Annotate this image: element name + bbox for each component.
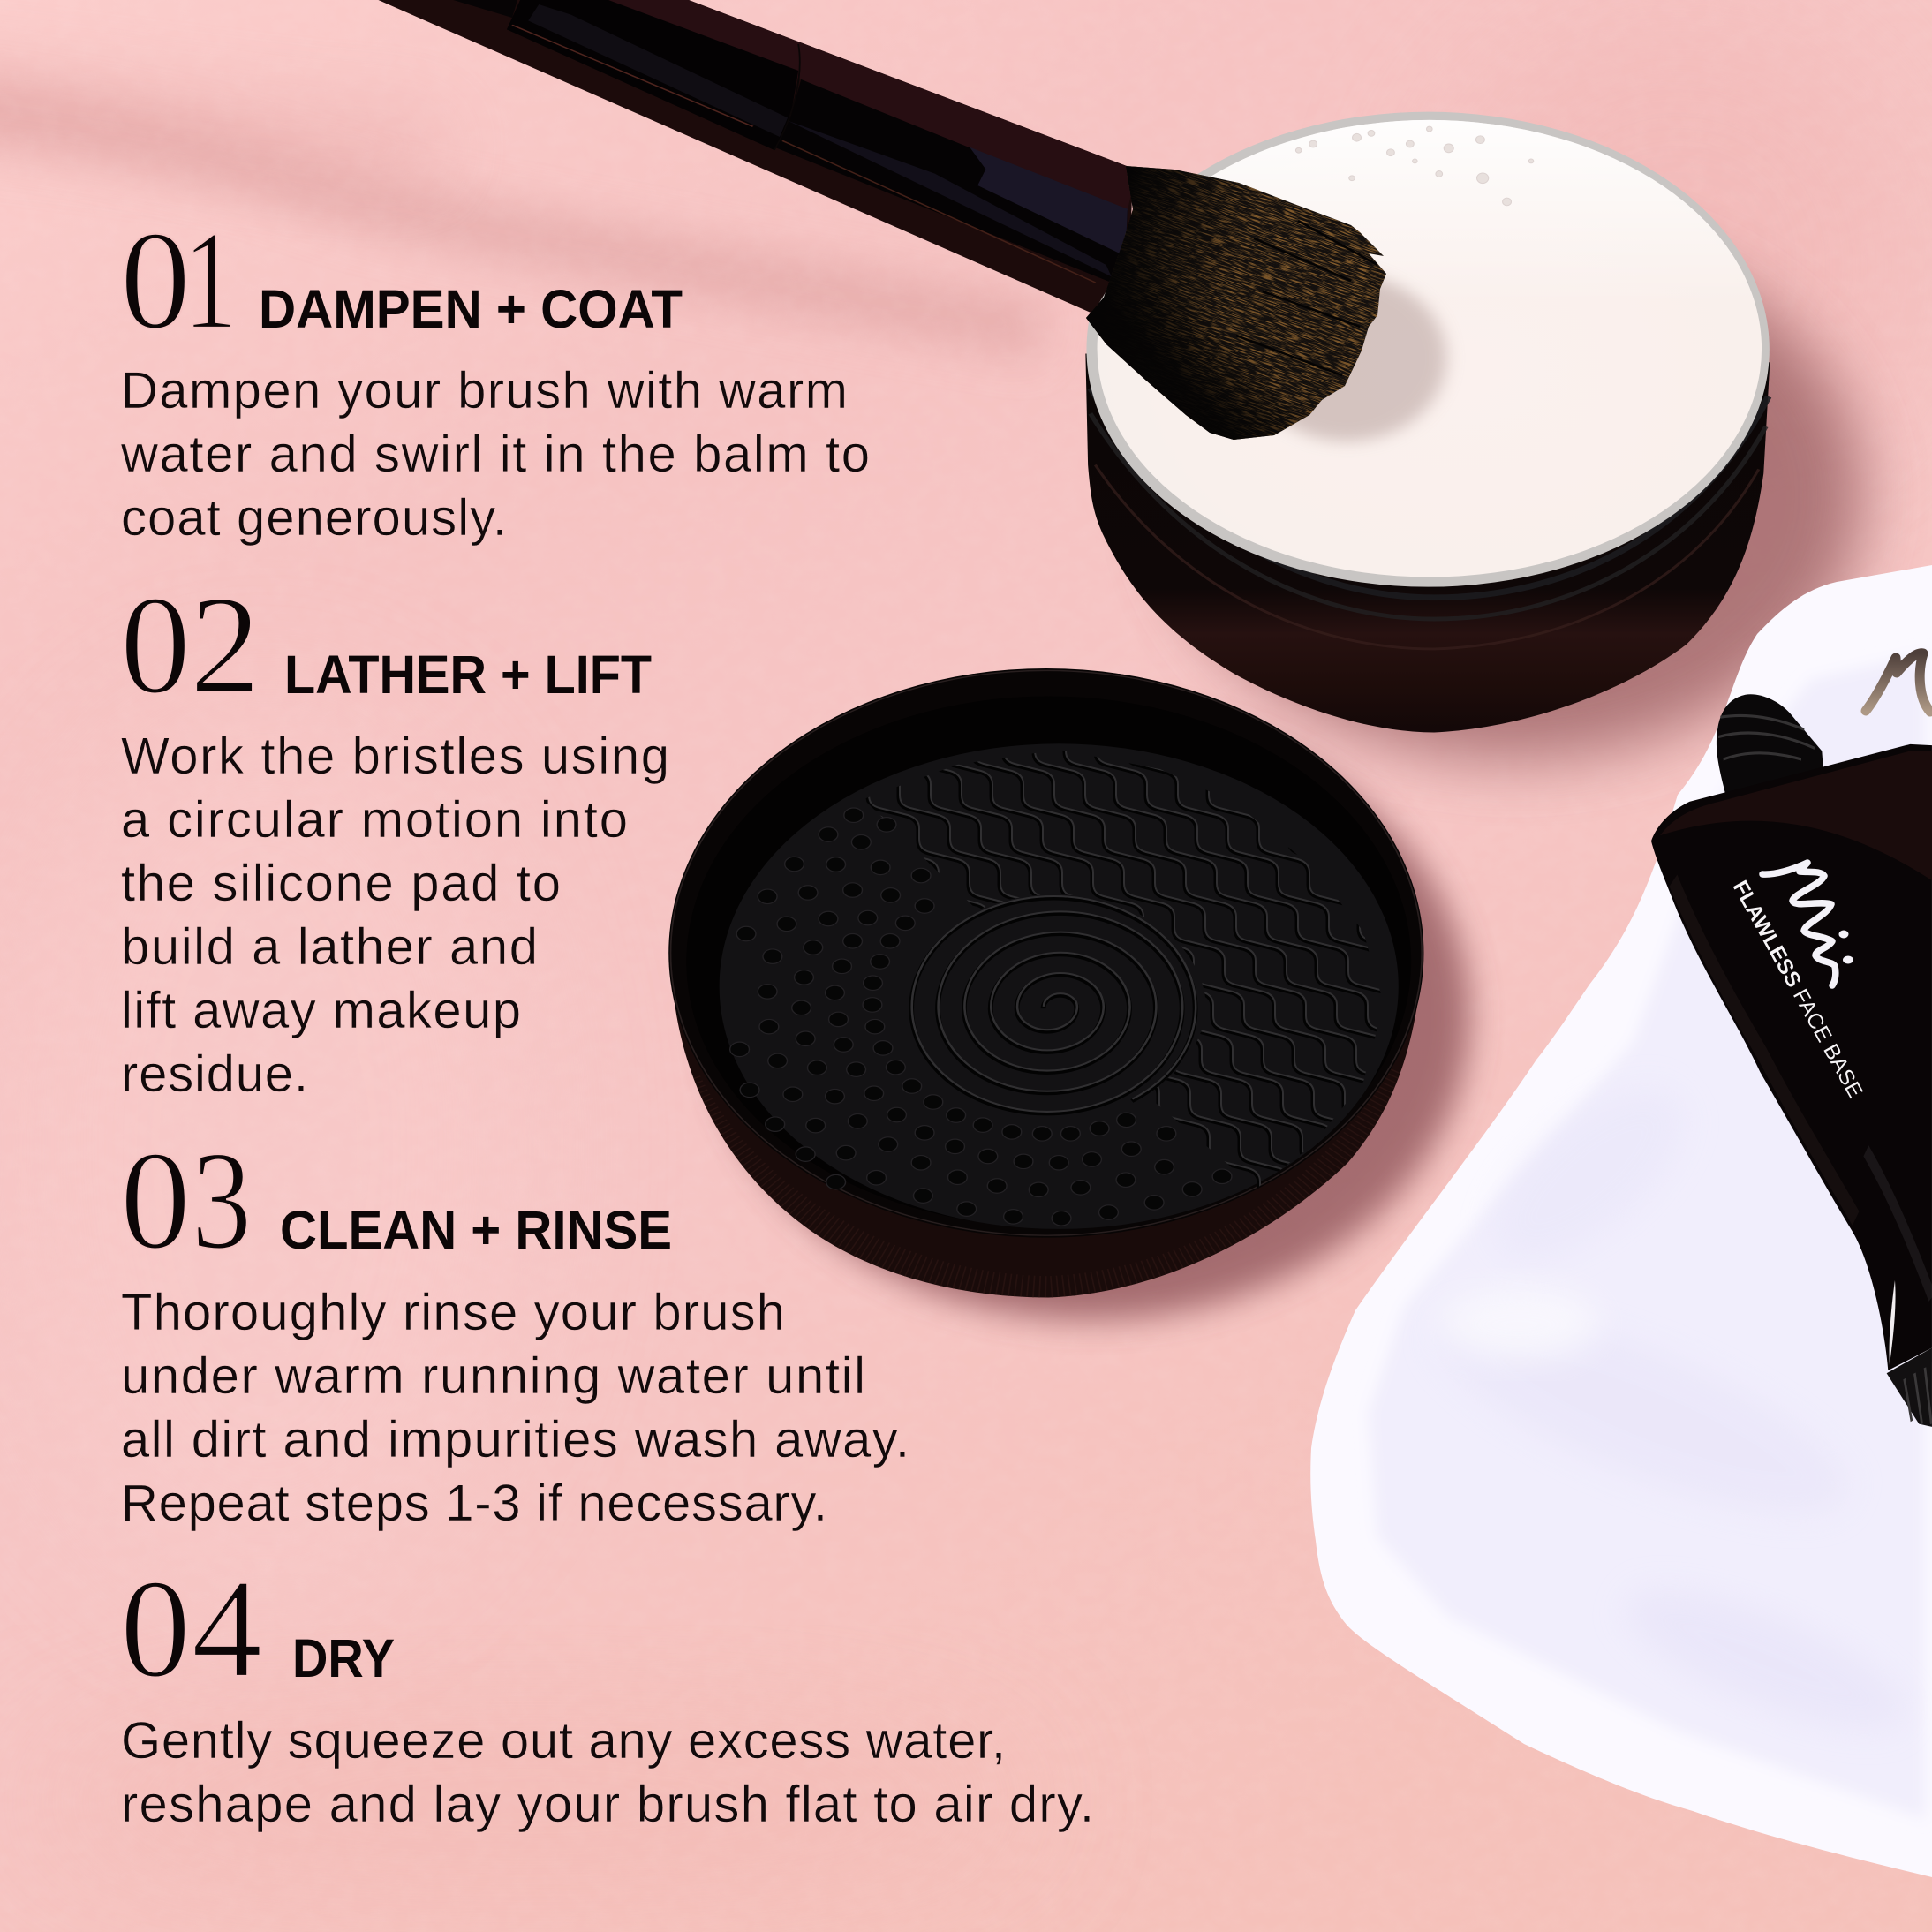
- step 3 body: under warm running water until: [121, 1347, 865, 1405]
- step 2 number: 0: [120, 566, 191, 723]
- step 3 body: Repeat steps 1-3 if necessary.: [121, 1475, 827, 1532]
- glossy black sections: [507, 0, 798, 150]
- silicone pad: [720, 743, 1399, 1229]
- step 2 body: a circular motion into: [121, 791, 628, 849]
- brush shadow on balm: [1248, 275, 1446, 441]
- step 3: [120, 1121, 909, 1532]
- step 1 heading: DAMPEN + COAT: [259, 279, 683, 339]
- step 2 number: 2: [190, 566, 260, 723]
- step 1 body: water and swirl it in the balm to: [120, 426, 870, 483]
- jar cast shadow: [1166, 230, 1863, 759]
- step 2 body: build a lather and: [121, 918, 538, 976]
- step 3 number: [120, 1121, 252, 1279]
- dot texture: [730, 808, 1232, 1226]
- towel: [1310, 565, 1932, 1877]
- step 4 body: Gently squeeze out any excess water,: [121, 1712, 1006, 1770]
- tube crimp: [1887, 1348, 1932, 1427]
- golden bristle strands: [1091, 166, 1386, 440]
- step 3 heading: CLEAN + RINSE: [280, 1200, 672, 1260]
- step 3 number: 0: [120, 1121, 191, 1279]
- step 4 number: [120, 1550, 262, 1707]
- step 4: [120, 1550, 1094, 1833]
- step 1 body: Dampen your brush with warm: [121, 362, 848, 419]
- step 2 body: the silicone pad to: [121, 855, 561, 912]
- navy highlight: [970, 147, 1128, 256]
- step 2 number: [120, 566, 260, 723]
- lid cast shadow: [711, 711, 1470, 1320]
- makeup brush handle: [378, 0, 1132, 313]
- Mii script logo: [1762, 863, 1853, 985]
- step 3 body: all dirt and impurities wash away.: [121, 1411, 909, 1468]
- lid rim: [668, 668, 1423, 1238]
- step 2 heading: LATHER + LIFT: [284, 645, 652, 705]
- step 4 body: reshape and lay your brush flat to air dry.: [121, 1776, 1094, 1833]
- step 3 body: Thoroughly rinse your brush: [121, 1284, 785, 1341]
- step 1 number: [120, 201, 237, 358]
- wave texture: [865, 751, 1381, 1188]
- step 4 heading: DRY: [292, 1628, 395, 1688]
- step 1 number: 0: [120, 201, 191, 358]
- balm: [1098, 120, 1762, 577]
- step 2 body: lift away makeup: [121, 982, 521, 1039]
- step 4 body: [121, 1712, 1094, 1833]
- tube of Flawless Face Base: [1651, 694, 1932, 1427]
- dark shading: [1086, 260, 1339, 440]
- step 4 number: 4: [192, 1550, 262, 1707]
- step 3 body: [121, 1284, 909, 1532]
- step 2 body: [121, 728, 669, 1103]
- handle body: [378, 0, 1132, 313]
- gloss streak: [1890, 1280, 1896, 1365]
- logo on towel: [1866, 653, 1930, 712]
- brush bristles: [1086, 166, 1386, 440]
- tube label text: FLAWLESS FACE BASE: [1728, 877, 1868, 1102]
- step 1 body: [120, 362, 870, 547]
- spiral texture: [911, 896, 1196, 1113]
- lid inner wall: [686, 696, 1411, 1226]
- jar body: [1085, 354, 1770, 732]
- step 4 number: 0: [120, 1550, 191, 1707]
- step 2 body: residue.: [121, 1045, 308, 1103]
- silicone pad lid: [668, 668, 1423, 1298]
- step 2: [120, 566, 669, 1103]
- silver rim: [1086, 112, 1770, 587]
- cleansing balm jar: [1085, 112, 1770, 732]
- foam bubbles: [1295, 126, 1534, 206]
- step 1: [120, 201, 870, 547]
- step 3 number: 3: [192, 1121, 252, 1279]
- step 1 body: coat generously.: [121, 489, 507, 547]
- tube neck: [1717, 694, 1825, 813]
- step 2 body: Work the bristles using: [121, 728, 669, 785]
- step 1 number: 1: [184, 201, 237, 358]
- tube body: [1651, 744, 1932, 1370]
- lid side wall: [674, 996, 1419, 1297]
